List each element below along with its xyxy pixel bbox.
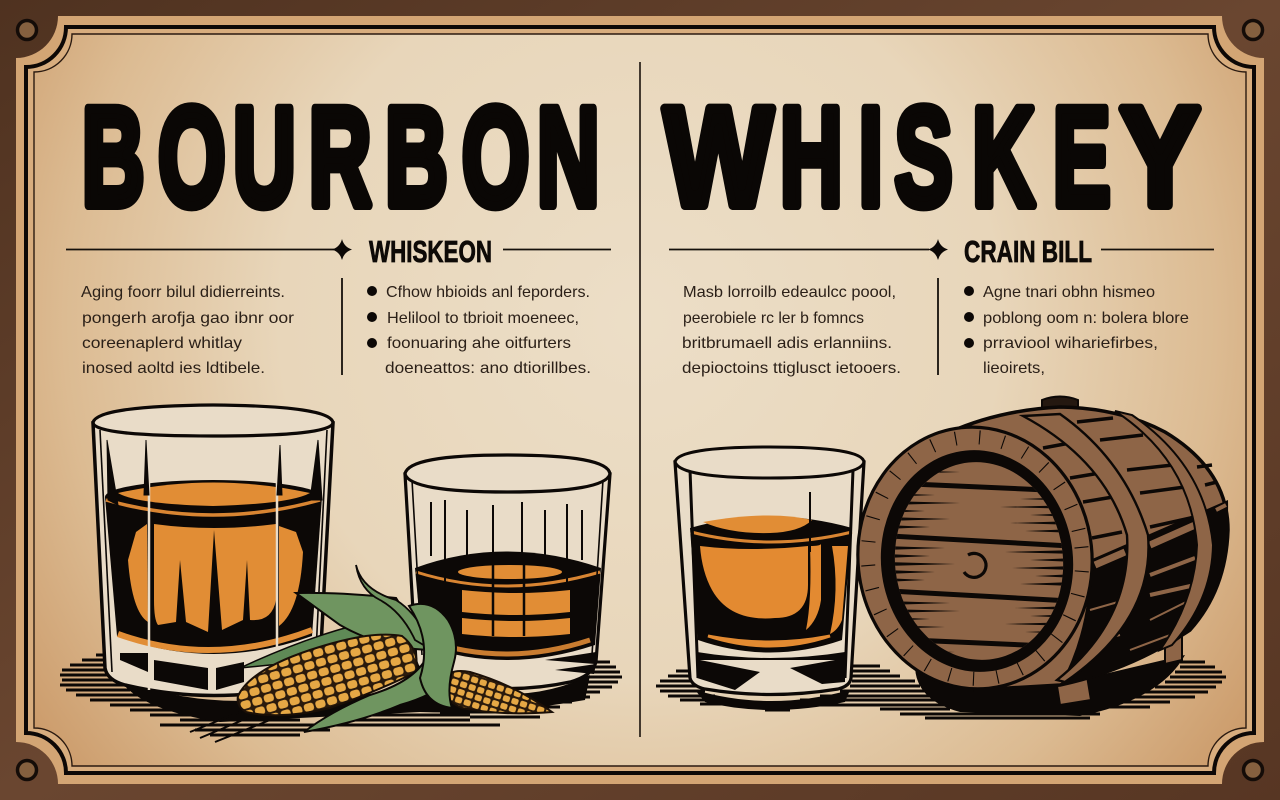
right section heading [669,234,1214,269]
left bullet list [367,284,591,377]
corn: small cob [442,671,552,713]
liquid: dark body [690,516,852,652]
right bullet list: Agne tnari obhn hismeo [983,284,1155,301]
barrel cast shadow [915,655,1185,716]
left column rule [341,278,343,375]
glass: small bourbon tumbler [405,455,610,689]
left bullet list: Helilool to tbrioit moeneec, [387,310,579,327]
barrel: centre knob [964,553,986,577]
right bullet list: lieoirets, [983,360,1045,377]
liquid: amber surface [703,515,812,533]
left paragraph: Aging foorr bilul didierreints. [81,284,285,301]
barrel: front hoop [1023,414,1149,682]
right section heading: CRAIN BILL [964,234,1092,269]
right paragraph: peerobiele rc ler b fomncs [683,310,864,327]
right paragraph [682,284,901,377]
liquid: dark body [415,552,601,660]
left paragraph [81,284,295,377]
left section heading [66,234,611,269]
liquid: amber side slivers [128,524,148,622]
left section heading: WHISKEON [369,234,492,269]
barrel: bung [1042,396,1078,416]
left paragraph: pongerh arofja gao ibnr oor [82,310,295,327]
left bullet list: doeneattos: ano dtiorillbes. [385,360,591,377]
center divider [639,62,641,737]
title: whiskey: HISKE [780,79,1111,235]
right paragraph: Masb lorroilb edeaulcc poool, [683,284,896,301]
husk knot [409,604,456,708]
glass: whiskey shot glass [675,447,864,694]
liquid: amber surface [118,482,310,506]
liquid: amber centre panel with spikes [154,524,276,632]
glass base shading [697,652,845,690]
right paragraph: britbrumaell adis erlanniins. [682,335,892,352]
right bullet list [964,284,1189,377]
title: bourbon: BOURBON [82,79,600,235]
husk leaf: behind cob [240,625,400,668]
left paragraph: coreenaplerd whitlay [82,335,242,352]
glass cut spikes [431,500,582,590]
cob: main kernels [238,635,417,715]
title: whiskey [664,78,1200,236]
barrel: head recess [870,441,1084,681]
husk leaf: lower sweep [304,650,448,732]
title: whiskey: Y [1120,78,1200,235]
husk leaf: upper [296,593,428,650]
liquid: dark body [105,484,322,654]
right column rule [937,278,939,375]
barrel [845,396,1228,705]
left paragraph: inosed aoltd ies ldtibele. [82,360,265,377]
left bullet list: foonuaring ahe oitfurters [387,335,571,352]
left ground shadow hatching [60,655,622,742]
barrel: dark lower staves [1060,500,1228,685]
barrel: stave lines [1043,418,1217,538]
title: whiskey: W [664,79,773,236]
barrel: head rim [845,415,1105,701]
barrel: rear hoop [1115,411,1213,650]
barrel: body [950,407,1228,690]
right ground shadow hatching [656,655,1226,718]
right paragraph: depioctoins ttiglusct ietooers. [682,360,901,377]
barrel: head planks [885,454,1073,668]
barrel: feet [1057,676,1091,705]
corn: left husk and main cob [238,565,552,732]
right bullet list: poblong oom n: bolera blore [983,310,1189,327]
glass: large bourbon tumbler [93,405,333,696]
barrel: rim ticks [856,426,1094,690]
glass facets and rim [149,436,277,690]
liquid: amber surface and grid [458,565,562,579]
left bullet list: Cfhow hbioids anl feporders. [386,284,590,301]
right bullet list: prraviool wihariefirbes, [983,335,1158,352]
liquid: amber U-shaped panel [700,546,808,618]
